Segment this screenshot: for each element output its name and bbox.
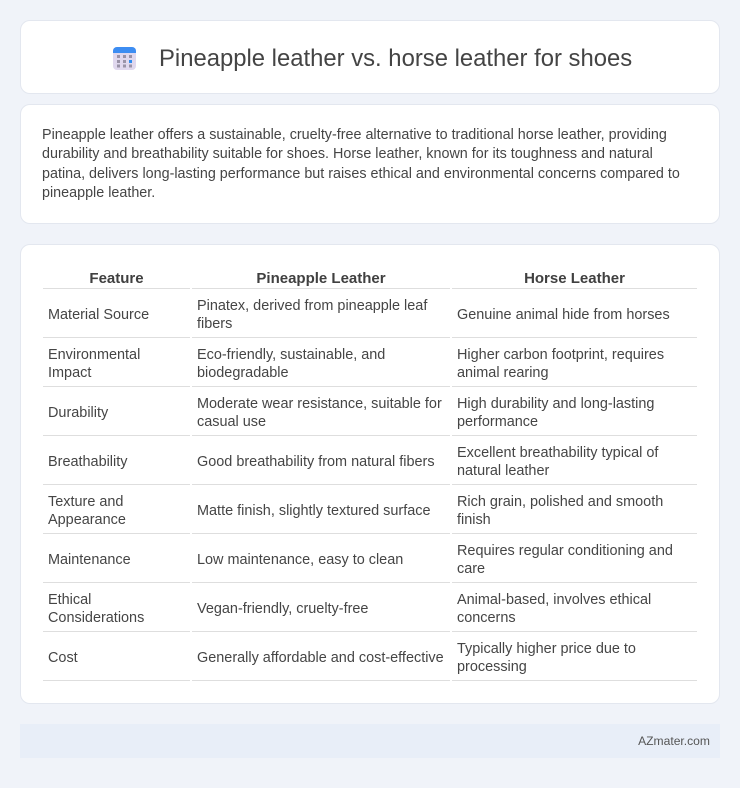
icon: calendar (113, 47, 136, 70)
row: material source: Material Source (48, 307, 149, 323)
durability: horse: performance (457, 414, 538, 430)
breathability: horse: Excellent breathability typical of (457, 445, 658, 461)
row: durability: Durability (48, 405, 108, 421)
texture: horse: finish (457, 512, 491, 528)
summary text: Pineapple leather offers a sustainable, cruelty-free alternative to traditional horse leather, providing (42, 127, 667, 143)
table header: pineapple leather: Pineapple Leather (256, 270, 386, 287)
footer brand: AZmater.com (638, 734, 710, 748)
environmental impact: horse (457, 347, 664, 381)
table header: horse leather: Horse Leather (524, 270, 625, 287)
maintenance: horse: care (457, 561, 485, 577)
summary text: durability and breathability suitable for shoes. Horse leather, known for its toughness and natural (42, 146, 653, 162)
maintenance: horse (457, 543, 673, 577)
ethical: horse: concerns (457, 610, 516, 626)
row: environmental impact (48, 347, 140, 381)
row: texture and appearance: Appearance (48, 512, 126, 528)
material source: horse: Genuine animal hide from horses (457, 307, 670, 323)
durability: pineapple (197, 396, 442, 430)
environmental impact: pineapple (197, 347, 385, 381)
environmental impact: pineapple: Eco-friendly, sustainable, and (197, 347, 385, 363)
cost: pineapple: Generally affordable and cost-effective (197, 650, 444, 666)
heading: Pineapple leather vs. horse leather for shoes (159, 45, 632, 72)
row: texture and appearance (48, 494, 126, 528)
cost: horse (457, 641, 636, 675)
breathability: horse: natural leather (457, 463, 549, 479)
texture: horse: Rich grain, polished and smooth (457, 494, 663, 510)
material source: pineapple (197, 298, 428, 332)
row: environmental impact: Impact (48, 365, 91, 381)
summary text: pineapple leather. (42, 185, 155, 201)
cost: horse: Typically higher price due to (457, 641, 636, 657)
row: cost: Cost (48, 650, 78, 666)
footer bar (20, 724, 720, 758)
summary text (42, 127, 680, 201)
environmental impact: pineapple: biodegradable (197, 365, 289, 381)
breathability: pineapple: Good breathability from natural fibers (197, 454, 435, 470)
ethical: horse: Animal-based, involves ethical (457, 592, 651, 608)
row: ethical considerations: Ethical (48, 592, 91, 608)
panel: summary (20, 104, 720, 224)
ethical: horse (457, 592, 651, 626)
row: texture and appearance: Texture and (48, 494, 123, 510)
durability: horse (457, 396, 654, 430)
row: maintenance: Maintenance (48, 552, 131, 568)
summary text: patina, delivers long-lasting performance but raises ethical and environmental concerns compared to (42, 166, 680, 182)
panel: title (20, 20, 720, 94)
environmental impact: horse: animal rearing (457, 365, 548, 381)
texture: horse (457, 494, 663, 528)
table header: feature: Feature (89, 270, 144, 287)
panel: comparison table (20, 244, 720, 704)
row: ethical considerations (48, 592, 144, 626)
ethical: pineapple: Vegan-friendly, cruelty-free (197, 601, 368, 617)
texture: pineapple: Matte finish, slightly textured surface (197, 503, 431, 519)
breathability: horse (457, 445, 658, 479)
maintenance: pineapple: Low maintenance, easy to clean (197, 552, 403, 568)
durability: pineapple: Moderate wear resistance, suitable for (197, 396, 442, 412)
row: ethical considerations: Considerations (48, 610, 144, 626)
row: environmental impact: Environmental (48, 347, 140, 363)
durability: pineapple: casual use (197, 414, 266, 430)
material source: pineapple: Pinatex, derived from pineapple leaf (197, 298, 427, 314)
durability: horse: High durability and long-lasting (457, 396, 654, 412)
maintenance: horse: Requires regular conditioning and (457, 543, 673, 559)
environmental impact: horse: Higher carbon footprint, requires (457, 347, 664, 363)
row: breathability: Breathability (48, 454, 127, 470)
cost: horse: processing (457, 659, 527, 675)
material source: pineapple: fibers (197, 316, 232, 332)
